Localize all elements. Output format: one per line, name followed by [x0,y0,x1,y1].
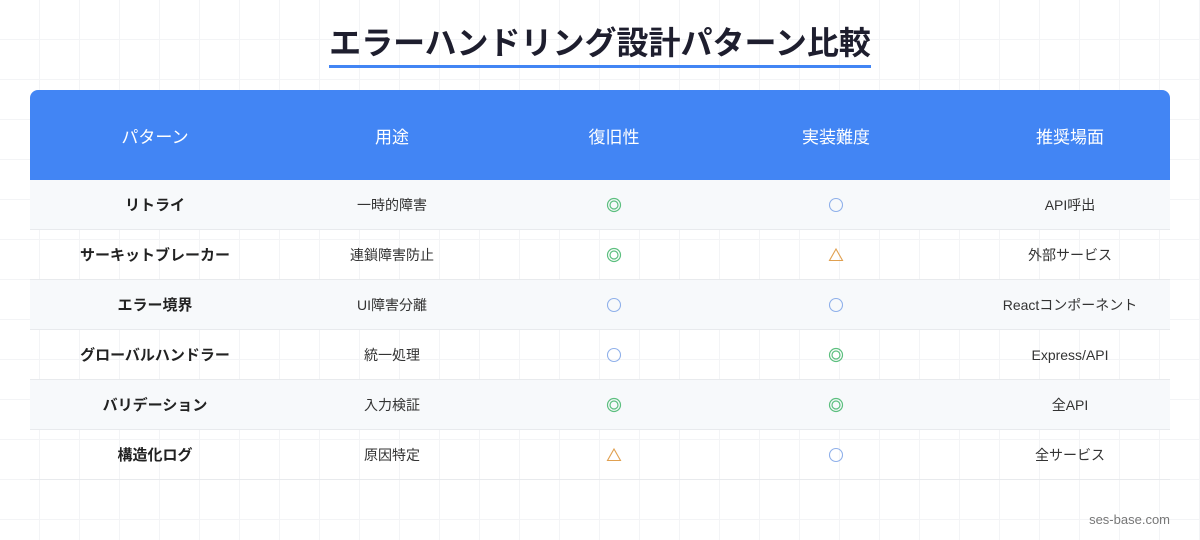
row: validation [30,380,1170,430]
table header: パターン [121,128,189,146]
row: global handler [30,330,1170,380]
footer credit: ses-base.com [1089,512,1170,527]
row: global handler: Express/API [1031,346,1109,362]
table header: 用途 [375,128,409,146]
row: structured log: 構造化ログ [117,447,192,464]
row: retry [30,180,1170,230]
row: error boundary: エラー境界 [117,297,192,314]
title: エラーハンドリング設計パターン比較 [329,18,871,64]
table header: 推奨場面 [1036,128,1104,146]
row: structured log: 全サービス [1035,446,1105,462]
row: circuit breaker: 連鎖障害防止 [350,246,434,262]
row: error boundary: Reactコンポーネント [1003,296,1137,312]
row: retry: リトライ [125,197,185,214]
row: retry: API呼出 [1045,196,1095,212]
table header [30,90,1170,180]
row: validation: 全API [1052,396,1088,412]
row: retry: 一時的障害 [357,196,427,212]
row: validation: バリデーション [103,397,207,414]
row: structured log [30,430,1170,480]
row: error boundary: UI障害分離 [357,296,427,312]
row: circuit breaker: 外部サービス [1028,246,1112,262]
comparison table [30,90,1170,480]
row: global handler: グローバルハンドラー [80,347,230,364]
row: error boundary [30,280,1170,330]
row: validation: 入力検証 [364,396,420,412]
row: circuit breaker [30,230,1170,280]
table header: 復旧性 [588,128,640,146]
row: circuit breaker: サーキットブレーカー [80,247,230,264]
table header: 実装難度 [802,128,870,146]
row: global handler: 統一処理 [364,346,420,362]
row: structured log: 原因特定 [364,446,420,462]
